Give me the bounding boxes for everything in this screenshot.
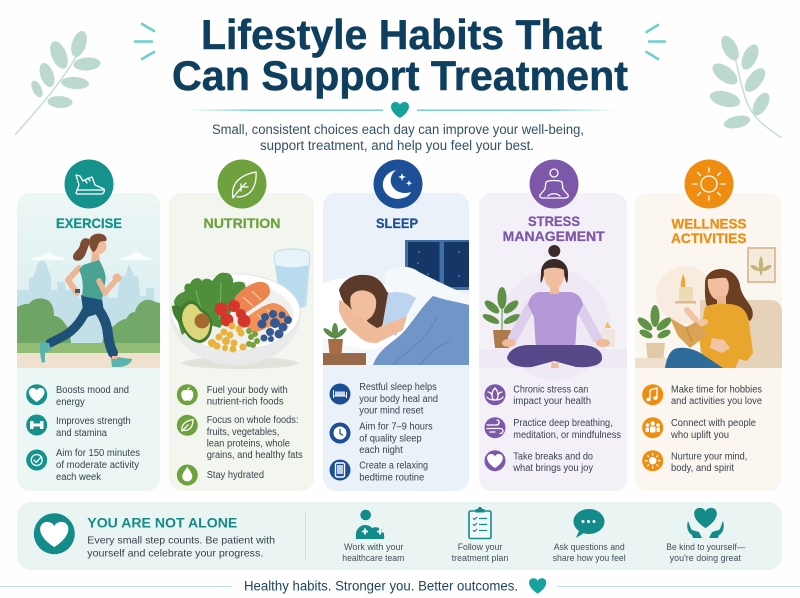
salmon: [234, 282, 291, 332]
title: [172, 11, 628, 99]
bullet: 150 minutes: of moderate activity: [56, 460, 139, 471]
subtitle: Small, consistent choices each day can improve your well-being,: [212, 122, 584, 137]
panel: exercise: [17, 160, 160, 491]
plant: [481, 287, 522, 348]
decorative leaf sprig right: [708, 33, 782, 138]
bullet: restful sleep: Restful sleep helps: [359, 382, 437, 393]
bullet: 150 minutes: Aim for 150 minutes: [56, 448, 140, 459]
bullet: hobbies: [642, 384, 763, 407]
item: ask questions: Ask questions and: [554, 542, 625, 552]
bullet: sleep hours: [330, 422, 433, 456]
bullet: hydrated: Stay hydrated: [207, 470, 264, 481]
heading: wellness activities: ACTIVITIES: [671, 231, 746, 246]
bullet: whole foods: fruits, vegetables,: [207, 427, 279, 438]
heading: sleep: SLEEP: [376, 216, 418, 231]
bullet: strength: and stamina: [56, 428, 108, 439]
nightstand and plant: [322, 323, 366, 365]
framed picture: [748, 248, 775, 282]
bullet: hobbies: and activities you love: [671, 396, 763, 407]
accent burst left: [135, 24, 154, 59]
bullet: sleep hours: each night: [359, 445, 403, 456]
salad greens: [172, 273, 246, 335]
item: ask questions: share how you feel: [553, 553, 626, 563]
bullet: bedtime routine: bedtime routine: [359, 472, 425, 484]
illustration: woman reading by candle: [635, 248, 782, 369]
panel: wellness activities: [635, 160, 782, 491]
bullet: boosts mood: energy: [56, 397, 85, 408]
panel: nutrition: [169, 160, 314, 491]
item: treatment plan: Follow your: [458, 542, 502, 552]
item: be kind: [666, 508, 745, 563]
icon: meditating figure: [530, 160, 578, 208]
armchair: [700, 300, 782, 368]
bullet: boosts mood: [26, 384, 129, 408]
subtitle: support treatment, and help you feel your best.: [260, 138, 534, 153]
bullet: chronic stress: impact your health: [513, 396, 591, 407]
bullet: fuel your body: nutrient-rich foods: [207, 396, 284, 408]
panel: stress management: [479, 160, 627, 491]
item: treatment plan: treatment plan: [452, 553, 508, 563]
bullet: nurture: [642, 450, 747, 474]
heading: stress management: MANAGEMENT: [503, 229, 605, 244]
bullet: strength: Improves strength: [56, 416, 131, 427]
bullet: nurture: Nurture your mind,: [671, 452, 747, 463]
jeans: [665, 348, 723, 368]
bullet: connect: who uplift you: [670, 430, 729, 441]
footer tagline: Healthy habits. Stronger you. Better outcomes.: [244, 579, 518, 594]
bullet: whole foods: Focus on whole foods:: [207, 415, 298, 426]
plant: [635, 305, 673, 368]
decorative leaf sprig left: [15, 29, 101, 135]
icon: heart badge: [34, 513, 75, 554]
bullet: sleep hours: Aim for 7–9 hours: [359, 422, 433, 432]
heading: exercise: EXERCISE: [56, 216, 122, 231]
item: healthcare team: healthcare team: [342, 553, 404, 563]
icon: sun: [684, 160, 734, 208]
bullet: take breaks: what brings you joy: [512, 463, 593, 474]
accent burst right: [646, 25, 665, 59]
bullet: strength: [26, 414, 131, 439]
runner figure: [40, 234, 132, 367]
panel: sleep: [322, 160, 469, 491]
bullet: sleep hours: of quality sleep: [359, 434, 422, 444]
bullet: hydrated: [177, 464, 264, 486]
item: ask questions: [553, 509, 626, 563]
icon: crescent moon and stars: [374, 160, 422, 208]
night window: [405, 240, 469, 290]
bullet: chronic stress: Chronic stress can: [513, 385, 588, 396]
bullet: whole foods: grains, and healthy fats: [207, 450, 303, 461]
bullet: 150 minutes: [26, 448, 140, 483]
bullet: connect: Connect with people: [671, 418, 757, 429]
item: healthcare team: Work with your: [344, 542, 404, 552]
bullet: connect: [642, 417, 757, 441]
heading: stress management: [503, 214, 605, 244]
illustration: woman running in park: [17, 234, 160, 368]
bullet: bedtime routine: Create a relaxing: [359, 460, 428, 472]
bullet: bedtime routine: [330, 460, 428, 484]
illustration: healthy food bowl and water glass: [171, 249, 310, 369]
bullet: restful sleep: your mind reset: [359, 406, 424, 416]
bullet: hobbies: Make time for hobbies: [671, 385, 762, 396]
tomatoes: [214, 300, 250, 328]
bullet: whole foods: lean proteins, whole: [207, 439, 291, 450]
face: [350, 290, 376, 321]
heading: wellness activities: [671, 216, 746, 246]
item: be kind: Be kind to yourself—: [666, 542, 745, 552]
item: be kind: you're doing great: [670, 553, 742, 563]
blueberries: [258, 310, 292, 342]
bullet: deep breathing: meditation, or mindfulness: [513, 430, 621, 441]
bullet: deep breathing: Practice deep breathing,: [513, 418, 613, 429]
bullet: whole foods: [177, 415, 303, 461]
bullet: take breaks: [484, 450, 594, 474]
callout text: YOU ARE NOT ALONE: [87, 516, 237, 531]
title: Can Support Treatment: [172, 52, 628, 99]
arm: [339, 300, 407, 343]
illustration: woman sleeping in bed: [322, 240, 469, 365]
candle on plate: [675, 274, 696, 304]
bullet: restful sleep: your body heal and: [359, 394, 438, 405]
blanket: [373, 296, 469, 365]
sweater: [699, 304, 753, 369]
footer tagline: [0, 578, 800, 594]
bullet: 150 minutes: each week: [56, 472, 101, 483]
bullet: boosts mood: Boosts mood and: [56, 385, 129, 396]
hair: [339, 274, 389, 328]
bullet: nurture: body, and spirit: [671, 463, 734, 474]
hair: [705, 269, 753, 321]
bullet: chronic stress: [484, 384, 591, 407]
chickpeas and peas: [208, 322, 246, 352]
bullet: restful sleep: [330, 382, 438, 416]
bullet: fuel your body: Fuel your body with: [207, 385, 288, 396]
item: treatment plan: [452, 507, 508, 563]
icon: running shoe: [64, 160, 114, 208]
panel: you are not alone: [17, 502, 782, 570]
subtitle: [212, 122, 584, 153]
avocado: [179, 301, 212, 343]
title divider with heart: [186, 102, 615, 118]
icon: leaf: [218, 160, 266, 208]
water glass: [274, 249, 310, 308]
heading: nutrition: NUTRITION: [204, 216, 280, 231]
title: Lifestyle Habits That: [201, 11, 602, 58]
illustration: woman meditating: [479, 245, 627, 380]
callout text: yourself and celebrate your progress.: [87, 548, 263, 560]
bullet: take breaks: Take breaks and do: [513, 452, 594, 463]
candle: [602, 322, 615, 347]
heading: stress management: STRESS: [528, 214, 580, 229]
bullet: fuel your body: [177, 384, 288, 408]
shirt: [382, 292, 416, 336]
item: healthcare team: [342, 510, 404, 563]
callout text: [87, 516, 275, 560]
bullet: deep breathing: [484, 417, 621, 441]
callout text: Every small step counts. Be patient with: [87, 534, 275, 546]
book: [670, 318, 708, 348]
heading: wellness activities: WELLNESS: [672, 216, 746, 232]
